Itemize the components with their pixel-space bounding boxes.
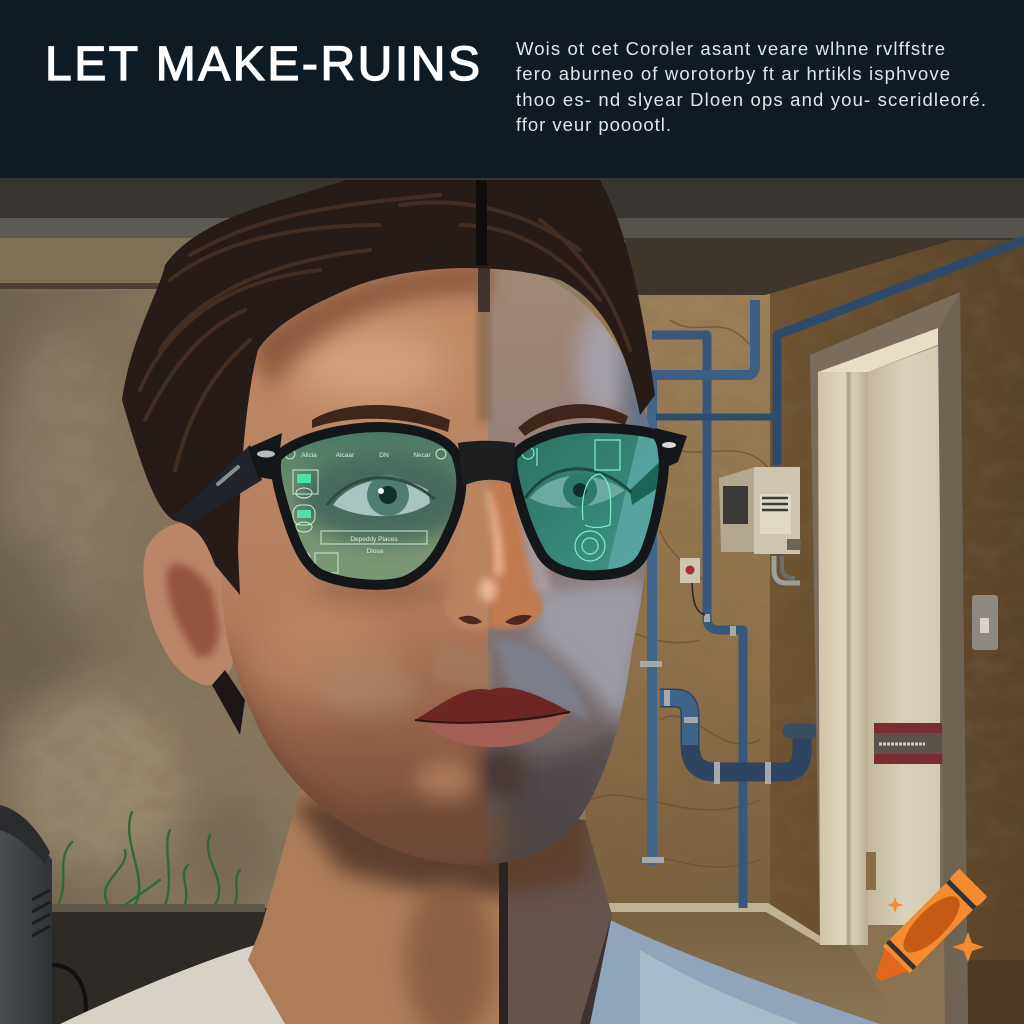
tip — [867, 948, 908, 989]
shirt — [60, 915, 880, 1024]
baseboard left — [45, 904, 265, 912]
collar shade — [580, 915, 612, 1024]
right floor — [585, 908, 945, 1024]
hair strands — [140, 195, 630, 470]
right upper lid — [525, 469, 632, 498]
hair centre line — [476, 180, 487, 265]
neck left — [240, 780, 503, 1024]
right wall — [770, 238, 1024, 1024]
nose cool edge — [518, 500, 552, 595]
door frame outer — [810, 292, 968, 1024]
light switch — [972, 595, 998, 650]
pipe fittings — [640, 614, 768, 860]
plant sprouts — [58, 812, 240, 905]
mouth line — [415, 712, 570, 723]
box side — [719, 467, 755, 552]
HUD labels: Depeddy Places — [350, 536, 398, 543]
HUD labels: Dlosa — [367, 548, 384, 555]
wall electrical box — [719, 467, 801, 583]
wallpaper band — [874, 723, 943, 764]
power cable — [52, 965, 86, 1024]
ceiling beam right — [610, 218, 1024, 238]
forehead hair shadow — [250, 262, 490, 390]
right hinge corner — [655, 428, 687, 470]
lower lip — [425, 712, 568, 747]
crayon icon — [864, 869, 987, 992]
neck right — [508, 819, 612, 1024]
switch cable — [692, 578, 705, 615]
floor beyond door — [850, 925, 945, 1024]
right shirt — [575, 915, 880, 1024]
right lens — [505, 420, 675, 590]
ceiling — [0, 178, 1024, 240]
nose highlight — [486, 490, 503, 575]
lens fill — [505, 420, 675, 590]
left lens — [280, 432, 456, 580]
HUD — [285, 449, 446, 573]
forehead highlight — [290, 327, 450, 403]
forehead top dark line — [478, 268, 490, 312]
ear outer — [143, 523, 235, 685]
nose right — [490, 480, 542, 629]
lintel — [818, 328, 938, 372]
hair mass — [122, 180, 655, 595]
vent — [723, 486, 748, 524]
box pipes — [774, 556, 800, 583]
forehead cool highlight — [577, 310, 629, 420]
chin light — [415, 762, 475, 798]
sparkle small — [887, 897, 903, 913]
left vertical pipe — [647, 375, 657, 865]
dark soffit — [625, 238, 960, 295]
plumbing wall — [585, 290, 775, 908]
hinge — [866, 852, 876, 890]
label — [760, 494, 791, 534]
upper left wall line — [0, 283, 165, 289]
reflection strip — [605, 430, 670, 580]
eye socket shadow left — [310, 574, 450, 606]
outlet — [680, 558, 700, 583]
label oval — [895, 888, 968, 961]
HUD labels: Alicia — [301, 452, 317, 459]
left cheek light — [253, 610, 386, 710]
description text: thoo es- nd slyear Dloen ops and you- sceridleoré. — [516, 89, 986, 110]
wall texture — [0, 238, 1024, 908]
pipe cap — [790, 724, 811, 738]
left iris — [367, 474, 409, 516]
HUD labels: Necar — [413, 452, 432, 459]
bands — [888, 881, 975, 968]
brow left — [312, 405, 450, 432]
HUD labels — [301, 452, 432, 555]
nostril — [458, 615, 532, 625]
cool half — [488, 268, 650, 864]
crayon end — [950, 869, 987, 906]
description text: fero aburneo of worotorby ft ar hrtikls isphvove — [516, 63, 950, 84]
nose tip highlight — [479, 578, 497, 602]
nose bridge light — [445, 480, 490, 630]
ceiling beam left — [0, 218, 260, 238]
device bottom left — [0, 805, 86, 1024]
far right wall skirting shade — [968, 960, 1024, 1024]
neck divider — [499, 860, 508, 1024]
lower neck hair — [212, 670, 245, 735]
large trap pipe — [660, 698, 802, 772]
brow right — [518, 404, 628, 436]
upper left wall band — [0, 238, 230, 285]
left upper lid — [327, 478, 435, 505]
upper branch pipe — [652, 335, 743, 908]
box front — [754, 467, 800, 554]
chin shadow — [488, 805, 514, 864]
right pupil — [573, 483, 587, 497]
description text: Wois ot cet Coroler asant veare wlhne rvlffstre — [516, 38, 945, 59]
green reflection band — [630, 452, 670, 505]
sparkle large — [952, 932, 984, 962]
neck centre shading — [405, 880, 495, 1024]
wall mottling — [0, 330, 280, 910]
left eye white — [333, 479, 430, 516]
right jaw shadow — [500, 725, 618, 860]
face — [222, 268, 650, 865]
ear inner — [166, 564, 219, 657]
right frame — [512, 428, 664, 575]
upper lip — [415, 688, 570, 723]
plumbing — [640, 240, 1024, 908]
label lines — [762, 498, 788, 510]
shirt highlight — [640, 950, 800, 1024]
horizontal pipe — [656, 414, 778, 420]
HUD labels: DN — [379, 452, 389, 459]
glasses — [173, 420, 687, 590]
stubble left — [332, 670, 417, 718]
left hinge corner — [248, 433, 282, 480]
bridge — [458, 441, 515, 486]
title: LET MAKE-RUINS — [45, 38, 480, 91]
eye socket shade — [297, 451, 473, 543]
right eye white — [530, 476, 625, 508]
ear — [143, 523, 235, 685]
left frame — [276, 427, 461, 585]
wall cracks — [590, 320, 770, 867]
left pupil — [379, 486, 397, 504]
baseboard right — [585, 903, 820, 944]
small connector — [787, 539, 801, 550]
HUD — [522, 440, 620, 561]
inner jamb — [818, 368, 868, 945]
left shirt — [60, 945, 300, 1024]
doorway — [810, 292, 968, 1024]
right jamb — [938, 292, 968, 1024]
diagonal ceiling pipe — [777, 240, 1024, 465]
lens fill — [270, 420, 470, 590]
crayon body — [883, 873, 983, 973]
temple cool edge — [613, 344, 650, 428]
left rivet — [257, 450, 275, 458]
right cheek blue — [535, 581, 650, 730]
hair — [122, 180, 655, 595]
device top — [0, 805, 50, 864]
description text — [516, 38, 986, 135]
right iris — [563, 473, 597, 507]
chin centre dark — [480, 748, 520, 795]
device body — [0, 816, 52, 1024]
header band — [0, 0, 1024, 178]
HUD tags — [297, 474, 311, 483]
neck — [240, 780, 623, 1024]
plate highlight — [879, 742, 925, 746]
neck shadow — [290, 800, 590, 895]
under nose left shadow — [435, 650, 492, 690]
left floor — [0, 908, 300, 1024]
right mustache blue — [495, 640, 590, 720]
temple highlight — [218, 467, 238, 484]
HUD labels: Alcaar — [336, 452, 355, 459]
left catchlight — [378, 488, 384, 494]
left wall — [0, 238, 640, 908]
right rivet — [662, 442, 676, 448]
warm half — [222, 268, 488, 830]
trap pipe entry — [660, 698, 690, 745]
description text: ffor veur pooootl. — [516, 114, 671, 135]
hair behind — [212, 670, 245, 735]
horizontal branch — [652, 300, 755, 375]
device vents — [32, 890, 50, 936]
metal plate — [874, 733, 943, 754]
temple arm — [173, 445, 262, 524]
left jaw shadow — [232, 654, 323, 808]
room interior — [868, 345, 940, 945]
forehead divider — [478, 262, 490, 422]
